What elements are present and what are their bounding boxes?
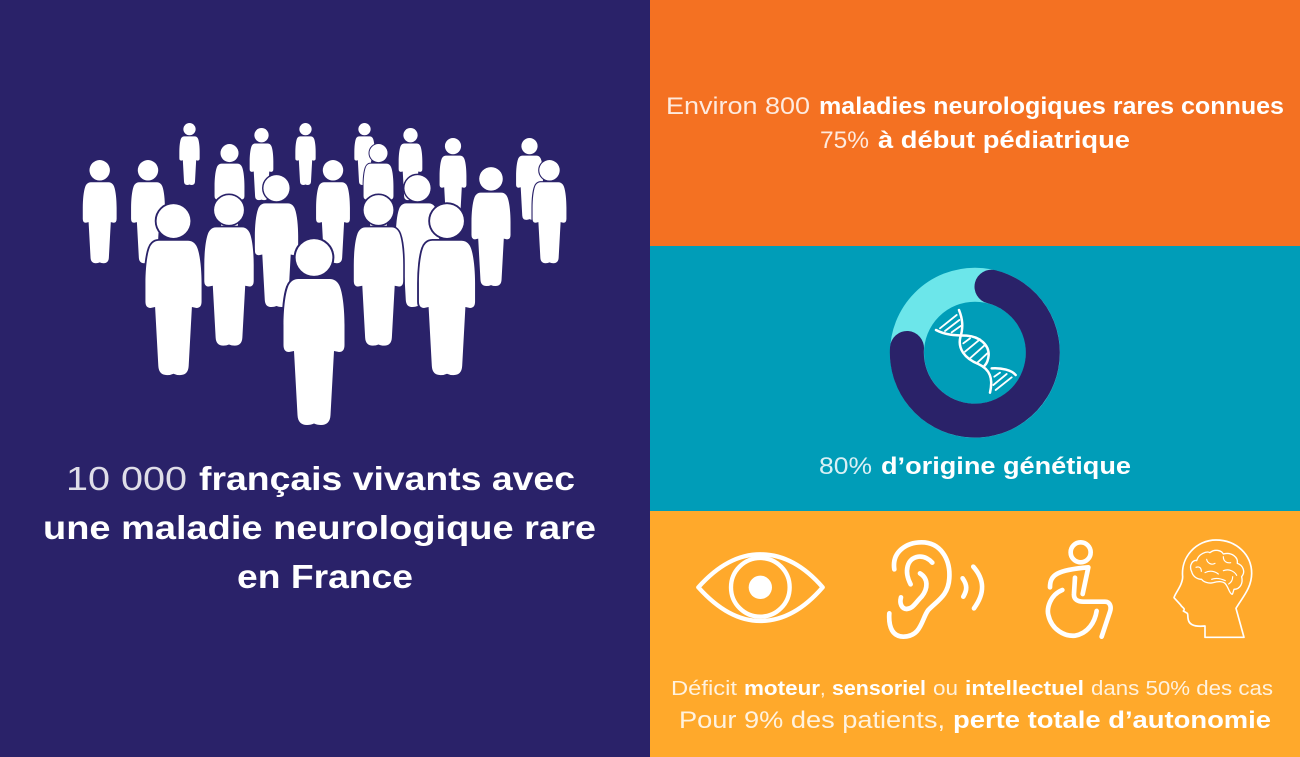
heading: 10 000 français: une maladie neurologique rare	[43, 509, 596, 546]
text: déficit: moteur	[744, 678, 820, 700]
heading: 10 000 français: 10 000	[66, 460, 187, 497]
icon: wheelchair	[1048, 542, 1111, 637]
text: déficit: ,	[820, 678, 826, 700]
text: maladies neurologiques	[666, 93, 1284, 154]
text: maladies neurologiques: 75%	[820, 127, 869, 154]
heading: 10 000 français	[43, 460, 596, 595]
text: maladies neurologiques: maladies neurologiques rares connues	[819, 93, 1284, 120]
text: déficit: ou	[933, 678, 958, 700]
icon: head with brain	[1174, 540, 1252, 637]
text: déficit	[671, 678, 1273, 700]
panel: orange	[650, 0, 1300, 246]
icon: crowd of people	[83, 123, 566, 425]
text: déficit: intellectuel	[965, 678, 1084, 700]
text: origine génétique: 80%	[819, 453, 872, 480]
heading: 10 000 français: français vivants avec	[199, 460, 575, 497]
heading: 10 000 français: en France	[237, 558, 413, 595]
text: déficit: sensoriel	[832, 678, 926, 700]
text: déficit: dans 50% des cas	[1091, 678, 1273, 700]
panel: amber	[650, 511, 1300, 757]
text: déficit: Déficit	[671, 678, 738, 700]
text: origine génétique: d’origine génétique	[881, 453, 1131, 480]
chart: donut 80%	[907, 285, 1043, 421]
text: maladies neurologiques: à début pédiatrique	[878, 127, 1130, 154]
text: perte totale d'autonomie: perte totale d’autonomie	[953, 707, 1271, 734]
icon: DNA helix	[936, 310, 1016, 393]
icon: ear	[889, 542, 982, 637]
icon: eye	[698, 554, 823, 621]
text: maladies neurologiques: Environ 800	[666, 93, 810, 120]
text: perte totale d'autonomie	[679, 707, 1271, 734]
panel: teal	[650, 246, 1300, 511]
panel: left navy background	[0, 0, 650, 757]
text: perte totale d'autonomie: Pour 9% des patients,	[679, 707, 945, 734]
